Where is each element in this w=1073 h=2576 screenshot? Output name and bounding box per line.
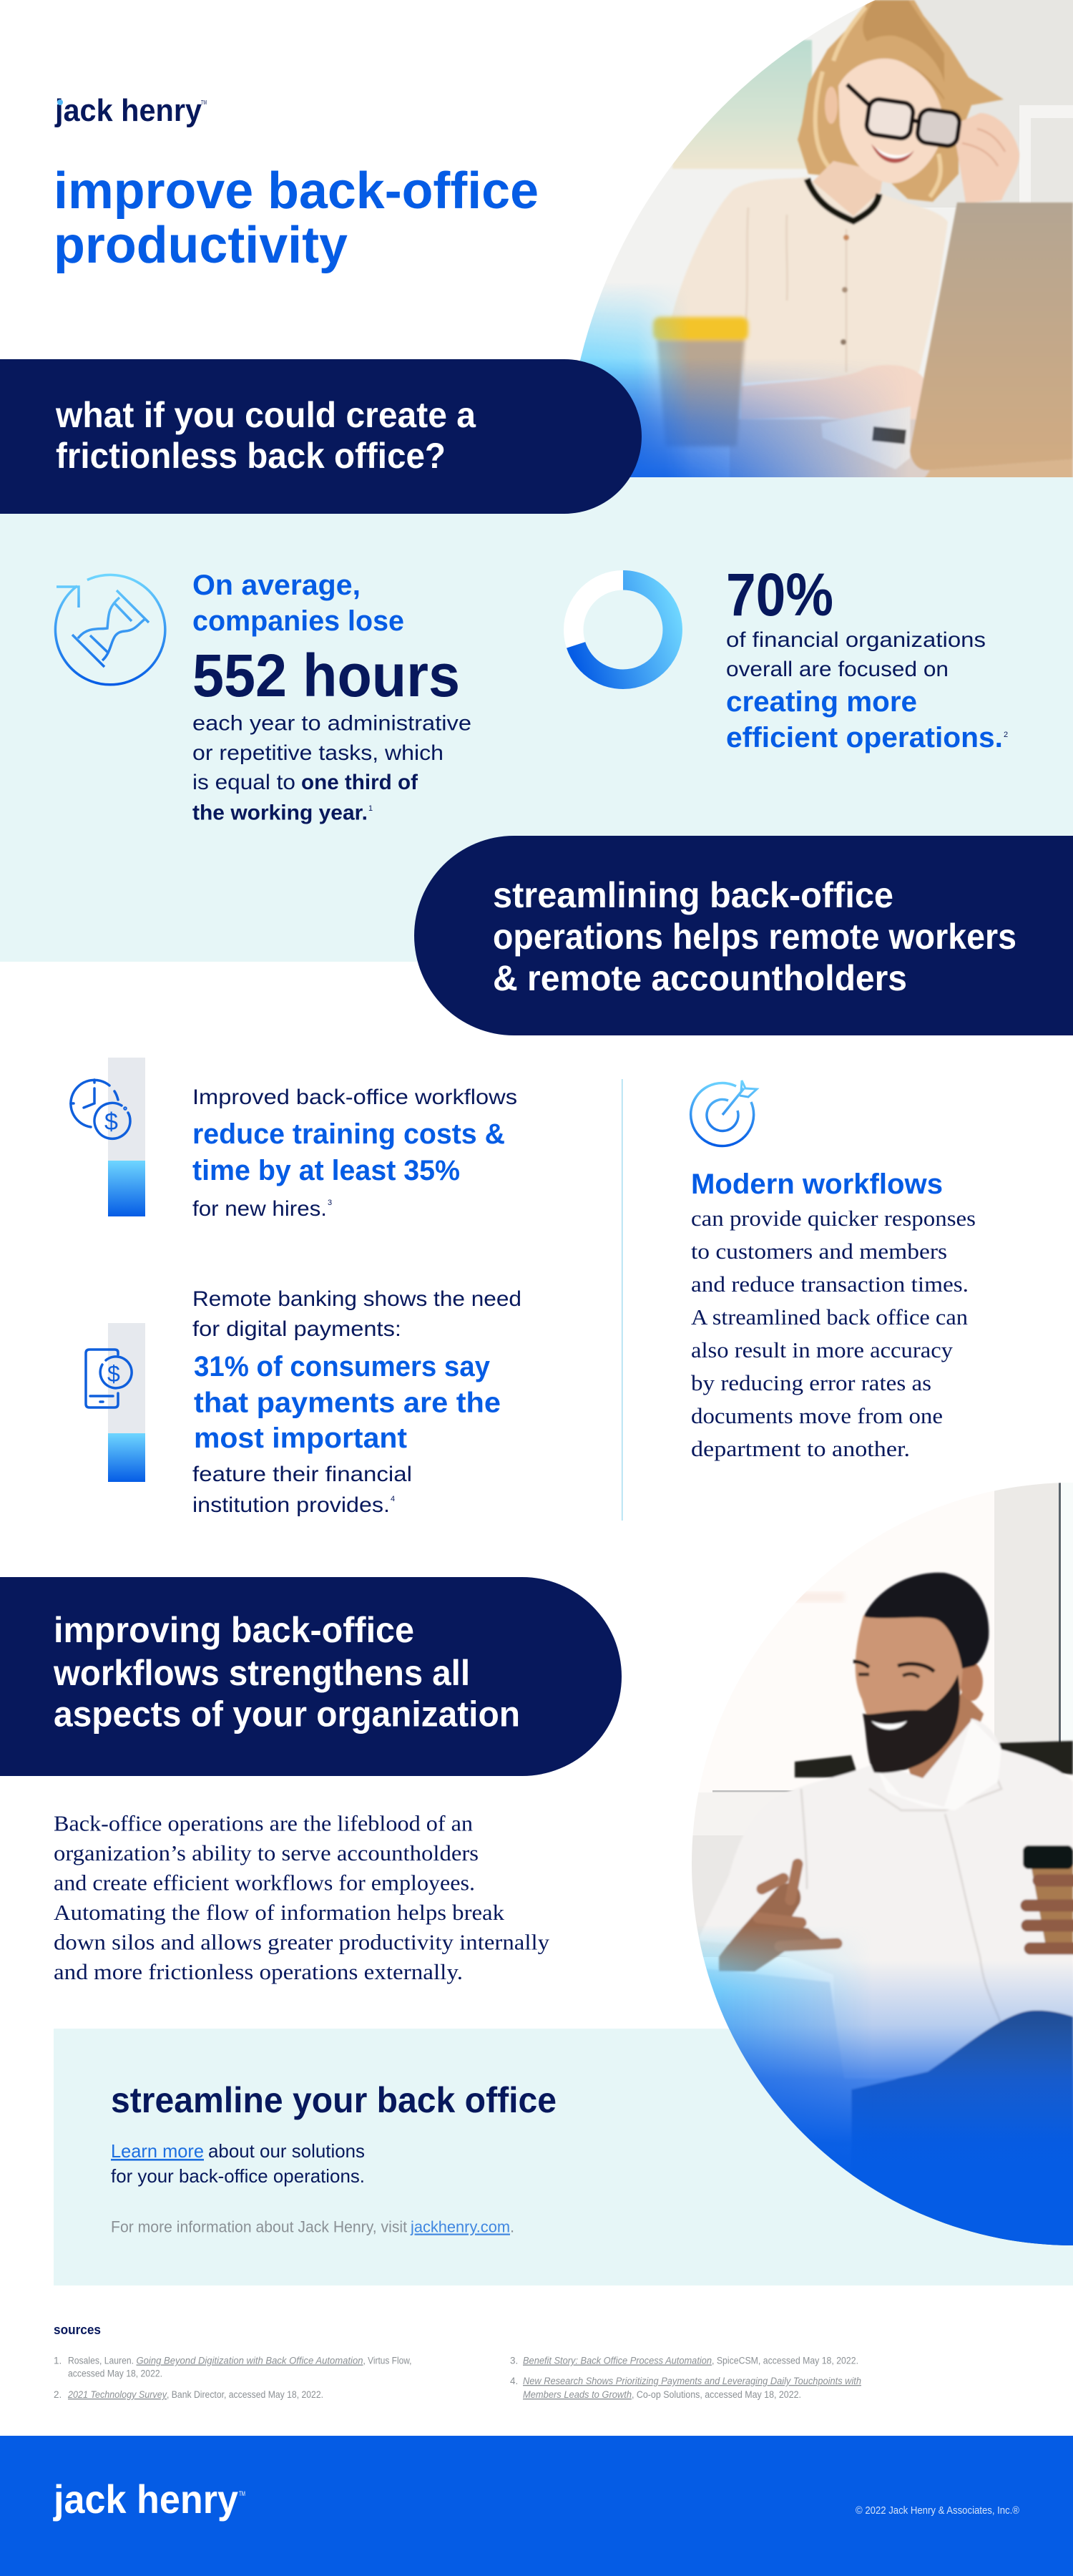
photo: man with coffee in circular crop bbox=[687, 1481, 1073, 2254]
sources list column 2: Benefit Story: Back Office Process Automation bbox=[523, 2356, 712, 2366]
text: digital payments: most important bbox=[194, 1423, 407, 1454]
stat: 70% of financial organizations bbox=[726, 561, 1008, 753]
typing arm bbox=[741, 365, 924, 421]
neck bbox=[907, 1692, 984, 1779]
icon: phone and dollar: $ bbox=[107, 1361, 120, 1387]
text: modern workflows: to customers and members bbox=[691, 1239, 947, 1264]
stat: 552 hours: or repetitive tasks, which bbox=[192, 741, 444, 765]
smile bbox=[871, 144, 914, 163]
banner: streamlining back-office operations bbox=[414, 836, 1073, 1035]
stat: 552 hours bbox=[192, 570, 471, 824]
sources list column 1: 2021 Technology Survey bbox=[67, 2389, 167, 2400]
text: modern workflows: also result in more accuracy bbox=[691, 1337, 954, 1362]
text: modern workflows bbox=[691, 1169, 976, 1461]
hair bbox=[864, 1573, 989, 1669]
text: reduce training costs bbox=[192, 1085, 517, 1221]
sources list column 1: , Bank Director, accessed May 18, 2022. bbox=[167, 2389, 323, 2400]
text: modern workflows: Modern workflows bbox=[691, 1169, 943, 1200]
sources list column 2: , SpiceCSM, accessed May 18, 2022. bbox=[712, 2356, 858, 2366]
text: lifeblood paragraph bbox=[54, 1810, 550, 1984]
bar: digital payments 31% bbox=[108, 1323, 145, 1482]
icon: hourglass with circular arrow bbox=[55, 575, 165, 685]
text: modern workflows: and reduce transaction times. bbox=[691, 1272, 969, 1297]
banner: improving back-office workflows bbox=[0, 1577, 622, 1776]
sources list column 2: , Co-op Solutions, accessed May 18, 2022. bbox=[632, 2389, 801, 2400]
chair bbox=[795, 1741, 1073, 1777]
text: modern workflows: department to another. bbox=[691, 1436, 910, 1461]
call to action text: Learn more bbox=[111, 2140, 204, 2162]
banner: improving back-office workflows: workflows strengthens all bbox=[53, 1653, 470, 1693]
icon: clock and dollar: $ bbox=[104, 1108, 118, 1136]
text: digital payments: 4 bbox=[391, 1495, 395, 1503]
footer logo trademark: TM bbox=[239, 2490, 245, 2497]
call to action text: streamline your back office bbox=[111, 2080, 557, 2120]
text: reduce training costs: reduce training costs & bbox=[192, 1118, 505, 1150]
sources list column 2 bbox=[510, 2356, 861, 2400]
table bbox=[730, 419, 930, 480]
collar bbox=[807, 179, 879, 221]
stat: 70% of financial organizations: 70% bbox=[726, 561, 833, 628]
text: lifeblood paragraph: organization’s ability to serve accountholders bbox=[54, 1840, 479, 1865]
bar: training cost reduction 35% bbox=[108, 1058, 145, 1216]
icon: clock and dollar bbox=[71, 1080, 130, 1138]
text: reduce training costs: for new hires. bbox=[192, 1197, 327, 1221]
text: digital payments: Remote banking shows the need bbox=[192, 1287, 521, 1311]
title: productivity bbox=[54, 217, 348, 274]
ear bbox=[960, 1662, 983, 1701]
collar bbox=[945, 1719, 1000, 1810]
sources list column 2: Members Leads to Growth bbox=[523, 2389, 632, 2400]
sources heading: sources bbox=[54, 2323, 101, 2337]
footer band bbox=[0, 2436, 1073, 2576]
laptop bbox=[910, 203, 1073, 470]
call to action text bbox=[111, 2080, 557, 2235]
hand at glasses bbox=[956, 113, 1019, 203]
text: digital payments: that payments are the bbox=[194, 1387, 501, 1418]
banner: streamlining back-office operations: operations helps remote workers bbox=[493, 917, 1016, 957]
sources list column 1: , Virtus Flow, bbox=[363, 2356, 412, 2366]
stat: 552 hours: companies lose bbox=[192, 605, 404, 637]
sources list column 1: Rosales, Lauren. bbox=[68, 2356, 134, 2366]
hair bbox=[798, 0, 1004, 202]
sources list column 1: Going Beyond Digitization with Back Office Automation bbox=[136, 2356, 363, 2366]
text: modern workflows: A streamlined back office can bbox=[691, 1304, 969, 1330]
stat: 552 hours: On average, bbox=[192, 570, 361, 601]
stat: 70% of financial organizations: efficient operations. bbox=[726, 722, 1003, 753]
fingers on cup bbox=[1027, 1880, 1073, 1948]
call to action text: jackhenry.com bbox=[410, 2218, 510, 2235]
stat: 70% of financial organizations: of financial organizations bbox=[726, 628, 986, 652]
stat: 552 hours: each year to administrative bbox=[192, 711, 471, 736]
call to action text: about our solutions bbox=[208, 2140, 365, 2162]
text: lifeblood paragraph: and more frictionless operations externally. bbox=[54, 1959, 463, 1984]
copyright: © 2022 Jack Henry & Associates, Inc.® bbox=[856, 2505, 1019, 2517]
title: improve back-office bbox=[54, 162, 539, 220]
text: digital payments: 31% of consumers say bbox=[194, 1351, 491, 1382]
text: reduce training costs: Improved back-office workflows bbox=[192, 1085, 517, 1109]
laptop bbox=[707, 1969, 888, 2082]
neck bbox=[812, 161, 883, 218]
pants bbox=[851, 2010, 1073, 2250]
text: lifeblood paragraph: Automating the flow of information helps break bbox=[54, 1900, 505, 1925]
teeth bbox=[871, 1721, 907, 1729]
icon: phone and dollar bbox=[86, 1350, 132, 1407]
shirt bbox=[697, 1719, 1073, 2075]
logo: jack henry: TM bbox=[201, 99, 207, 106]
stat: 552 hours: one third of bbox=[301, 771, 418, 794]
icon: target with arrow bbox=[691, 1080, 757, 1146]
stat: 70% of financial organizations: creating more bbox=[726, 686, 917, 718]
text: reduce training costs: 3 bbox=[328, 1199, 332, 1207]
call to action text: . bbox=[510, 2218, 514, 2235]
stat: 552 hours: the working year. bbox=[192, 801, 368, 824]
text: modern workflows: can provide quicker responses bbox=[691, 1206, 976, 1231]
face bbox=[854, 1614, 964, 1716]
sources list column 1: 1. bbox=[54, 2356, 62, 2366]
text: lifeblood paragraph: and create efficient workflows for employees. bbox=[54, 1870, 475, 1895]
stat: 70% of financial organizations: overall are focused on bbox=[726, 658, 949, 681]
photo: woman at laptop in circular crop bbox=[558, 0, 1073, 481]
title bbox=[54, 162, 539, 274]
photo gradient overlay bbox=[687, 1925, 1073, 2254]
sources list column 2: 3. bbox=[510, 2356, 518, 2366]
beard bbox=[863, 1674, 960, 1773]
donut chart: 70% bbox=[574, 580, 672, 679]
panel: streamline your back office background bbox=[54, 2029, 1073, 2285]
banner: what if you could: frictionless back office? bbox=[56, 436, 446, 476]
text: digital payments: institution provides. bbox=[192, 1493, 390, 1517]
banner: improving back-office workflows: aspects of your organization bbox=[54, 1694, 520, 1735]
shirt bbox=[667, 177, 948, 383]
stat: 552 hours: is equal to bbox=[192, 771, 295, 794]
stat: 70% of financial organizations: 2 bbox=[1004, 731, 1008, 739]
call to action text: For more information about Jack Henry, visit bbox=[111, 2218, 407, 2235]
text: modern workflows: documents move from one bbox=[691, 1403, 943, 1428]
logo: jack henry: jack henry bbox=[54, 93, 202, 128]
text: modern workflows: by reducing error rates as bbox=[691, 1370, 931, 1395]
text: lifeblood paragraph: down silos and allows greater productivity internally bbox=[54, 1929, 550, 1955]
keyboard base bbox=[821, 406, 911, 469]
stat: 552 hours: 1 bbox=[368, 804, 373, 813]
coffee cup bbox=[1030, 1860, 1073, 1946]
glasses bbox=[866, 98, 914, 140]
stat: 552 hours: 552 hours bbox=[192, 642, 460, 709]
brows and eyes bbox=[853, 1662, 934, 1672]
photo gradient overlay bbox=[579, 288, 899, 477]
text: reduce training costs: time by at least 35% bbox=[192, 1155, 460, 1186]
text: digital payments: feature their financial bbox=[192, 1463, 412, 1486]
banner: improving back-office workflows: improving back-office bbox=[54, 1610, 414, 1650]
banner: what if you could: what if you could create a bbox=[55, 395, 476, 435]
text: digital payments: for digital payments: bbox=[192, 1317, 401, 1341]
footer logo: jack henry bbox=[53, 2477, 238, 2522]
face bbox=[838, 59, 944, 183]
sources list column 2: New Research Shows Prioritizing Payments and Leveraging Daily Touchpoints with bbox=[523, 2376, 861, 2386]
sources list column 1: accessed May 18, 2022. bbox=[68, 2368, 162, 2379]
text: digital payments bbox=[192, 1287, 521, 1517]
sources list column 1 bbox=[54, 2356, 412, 2400]
ear bbox=[825, 87, 838, 124]
banner: streamlining back-office operations: & remote accountholders bbox=[493, 958, 907, 998]
panel: pale teal statistics background bbox=[0, 477, 1073, 962]
call to action text: for your back-office operations. bbox=[111, 2165, 365, 2187]
banner: streamlining back-office operations: streamlining back-office bbox=[493, 875, 893, 915]
sources list column 1: 2. bbox=[54, 2389, 62, 2400]
banner: what if you could bbox=[0, 359, 642, 514]
text: lifeblood paragraph: Back-office operations are the lifeblood of an bbox=[54, 1810, 474, 1836]
hand bbox=[719, 1883, 823, 1971]
coffee cup bbox=[653, 317, 748, 447]
sources list column 2: 4. bbox=[510, 2376, 518, 2386]
